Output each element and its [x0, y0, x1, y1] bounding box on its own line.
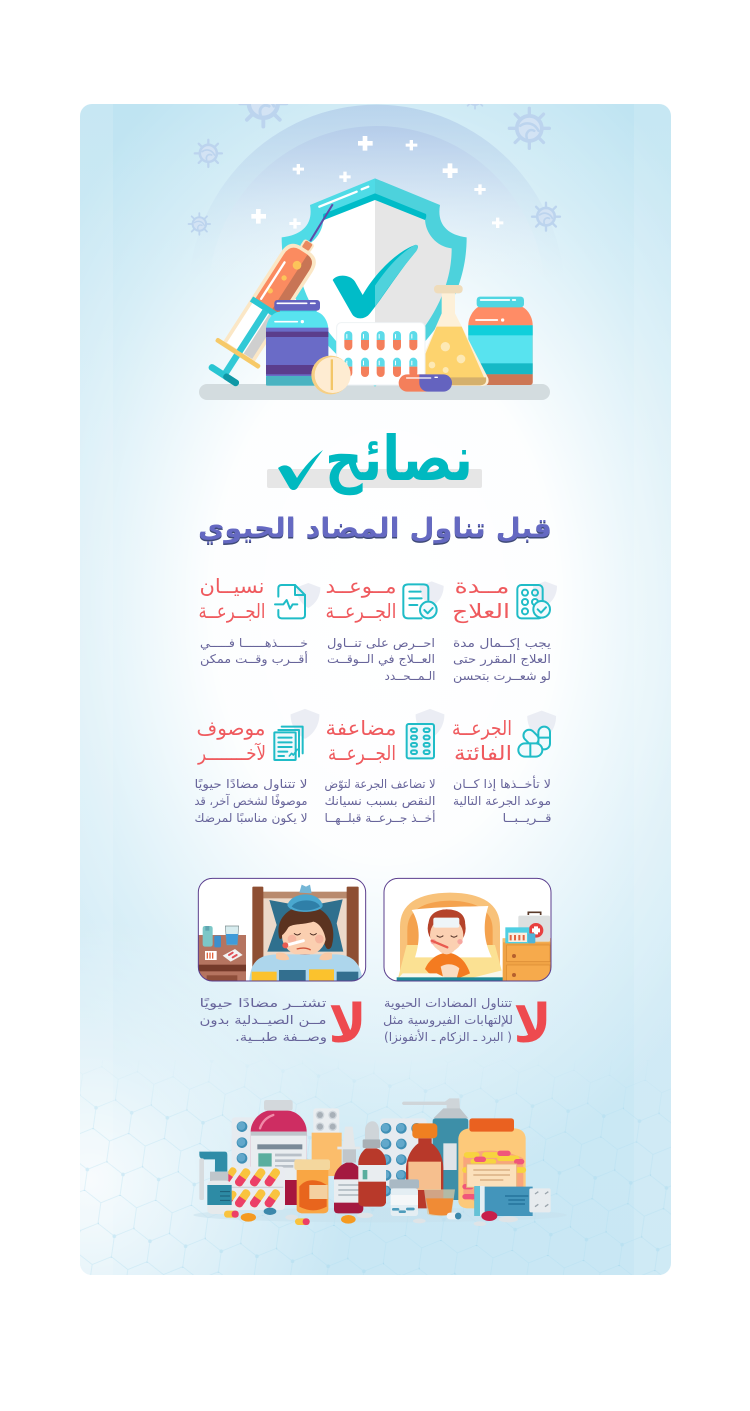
- illustration: blister pack: [337, 323, 425, 385]
- title: نصائح with check mark: [267, 422, 482, 495]
- warning: لا تشتر مضادًا حيويًا: وصــفة طبــية.: [235, 1030, 327, 1045]
- tip: مضاعفة الجرعة: مضاعفة: [326, 716, 396, 740]
- tip: نسيان الجرعة: أقــرب وقــت ممكن: [200, 651, 308, 667]
- tip: موعد الجرعة: الـمــحــدد: [384, 669, 436, 683]
- illustration: shield, syringe, jars and flask: [188, 80, 565, 400]
- icon: capsules: [518, 711, 556, 757]
- tip: نسيان الجرعة: الجــرعــة: [198, 599, 266, 623]
- warning: لا تشتر مضادًا حيويًا: [200, 994, 366, 1055]
- illustration: floor shadow: [199, 384, 550, 400]
- tip: مدة العلاج: يجب إكــمال مدة: [453, 636, 551, 650]
- tip: نسيان الجرعة: [198, 574, 320, 667]
- illustration: capsule: [399, 374, 452, 392]
- tip: موعد الجرعة: [326, 574, 444, 683]
- tip: موصوف لآخر: لا يكون مناسبًا لمرضك: [194, 811, 308, 826]
- tip: موعد الجرعة: احــرص على تنــاول: [327, 636, 435, 651]
- loose pills: [224, 1208, 518, 1226]
- tip: مضاعفة الجرعة: لا تضاعف الجرعة لتوّض: [324, 777, 436, 792]
- tip: مضاعفة الجرعة: النقص بسبب نسيانك: [324, 794, 436, 809]
- panel: sick child in orange bed: [384, 878, 553, 983]
- back blister packs: [232, 1108, 427, 1196]
- icon: shield with check mark: [282, 178, 467, 387]
- tip: مدة العلاج: [452, 574, 557, 684]
- icon: pill sheet check: [517, 581, 557, 618]
- tip: موعد الجرعة: مــوعــد: [326, 574, 396, 598]
- illustration: medicine bottles and pills: [193, 1098, 567, 1226]
- warning: لا تشتر مضادًا حيويًا: تشتــر مضادًا حيويًا: [200, 996, 326, 1011]
- title: نصائح with check mark: نصائح: [325, 422, 473, 495]
- red syrup bottle: [406, 1123, 443, 1208]
- tip: الجرعة الفائتة: لا تأخــذها إذا كــان: [453, 775, 551, 791]
- heading: قبل تناول المضاد الحيوي: قبل تناول المضاد الحيوي: [198, 514, 552, 546]
- tip: الجرعة الفائتة: الجرعــة: [452, 716, 512, 740]
- warning: لا تشتر مضادًا حيويًا: لا: [328, 994, 366, 1055]
- tip: مدة العلاج: العلاج: [452, 599, 510, 623]
- icon: plus sparkles: [251, 136, 503, 229]
- tip: موصوف لآخر: [194, 709, 319, 826]
- warning: لا تتناول المضادات: للإلتهابات الفيروسية مثل: [383, 1013, 513, 1028]
- tip: مدة العلاج: مــدة: [454, 574, 510, 598]
- big orange jar: [458, 1118, 526, 1208]
- tip: موعد الجرعة: الجــرعــة: [326, 599, 396, 623]
- icon: prescription documents: [274, 709, 319, 760]
- tip: مضاعفة الجرعة: الجــرعــة: [328, 741, 396, 765]
- warning: لا تشتر مضادًا حيويًا: مــن الصيــدلية بدون: [200, 1013, 326, 1028]
- tip: مضاعفة الجرعة: أخــذ جــرعــة قبلــهــا: [324, 810, 436, 826]
- tip: نسيان الجرعة: نسيــان: [200, 574, 264, 598]
- icon: pill strip: [407, 709, 444, 758]
- tip: نسيان الجرعة: خــــــذهــــــا فـــــي: [200, 636, 308, 650]
- medicine cup: [424, 1189, 455, 1216]
- tip: موصوف لآخر: موصوفًا لشخص آخر، قد: [194, 793, 308, 809]
- tip: الجرعة الفائتة: موعد الجرعة التالية: [453, 794, 551, 809]
- illustration: syringe: [200, 191, 355, 392]
- left spray bottle: [199, 1152, 232, 1214]
- ground shadow: [193, 1208, 567, 1222]
- illustration: round tablet: [311, 356, 351, 394]
- warning: لا تتناول المضادات: [383, 994, 552, 1055]
- warning: لا تتناول المضادات: تتناول المضادات الحيوية: [384, 996, 512, 1011]
- warning: لا تتناول المضادات: ( البرد ـ الزكام ـ الأنفونزا): [384, 1029, 512, 1045]
- front capsule blister: [222, 1166, 285, 1210]
- blue medicine box: [474, 1186, 551, 1216]
- illustration: flask with yellow liquid: [410, 285, 489, 386]
- tip: مدة العلاج: العلاج المقرر حتى: [453, 652, 551, 667]
- dropper bottle: [358, 1121, 386, 1207]
- tip: مضاعفة الجرعة: [324, 709, 444, 826]
- decorative arcs behind shield: [223, 104, 530, 210]
- tip: موصوف لآخر: لآخــــــــر: [197, 741, 266, 765]
- big red bottle: [251, 1100, 307, 1205]
- heading: قبل تناول المضاد الحيوي: قبل تناول المضاد الحيوي: [198, 513, 552, 544]
- tip: موصوف لآخر: موصوف: [196, 716, 266, 740]
- icon: document with pulse: [275, 583, 320, 618]
- panel: sick child in brown bed: [197, 878, 366, 982]
- warning: لا تتناول المضادات: لا: [514, 994, 552, 1055]
- illustration: orange and cyan jar: [468, 297, 533, 385]
- tip: موصوف لآخر: لا تتناول مضادًا حيويًا: [194, 777, 308, 792]
- panel: infographic card background: [80, 104, 671, 1275]
- icon: virus particles: [189, 80, 560, 235]
- tip: الجرعة الفائتة: الفائتة: [454, 741, 512, 765]
- icon: schedule document: [403, 581, 444, 618]
- orange pill bottle: [294, 1159, 330, 1213]
- spray can: [402, 1098, 468, 1200]
- small white jar: [389, 1179, 419, 1216]
- tip: الجرعة الفائتة: قــريــبــا: [502, 811, 552, 826]
- tip: موعد الجرعة: العــلاج في الــوقــت: [327, 652, 435, 667]
- illustration: purple jar: [266, 300, 328, 386]
- nasal spray bottle: [334, 1127, 363, 1213]
- tip: الجرعة الفائتة: [452, 711, 556, 826]
- tip: مدة العلاج: لو شعــرت بتحسن: [453, 669, 551, 684]
